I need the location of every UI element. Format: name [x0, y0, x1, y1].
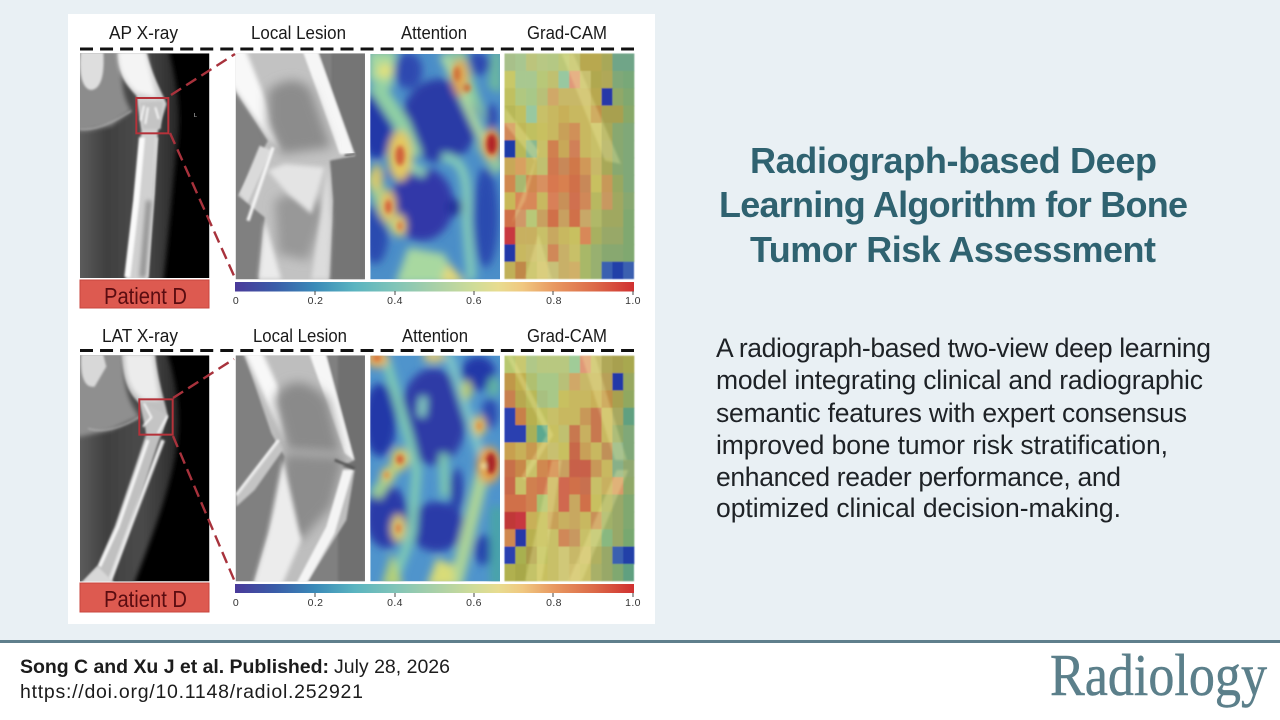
colorbar: LAT: 0.6: [466, 597, 482, 609]
panel: LAT row headings: [102, 326, 607, 346]
title: Tumor Risk Assessment: [750, 229, 1156, 270]
image: AP local lesion: [231, 47, 365, 284]
image: AP X-ray: L: [194, 113, 197, 119]
panel: LAT row headings: Local Lesion: [253, 326, 347, 346]
panel: figure: [68, 14, 655, 624]
panel: LAT row headings: Grad-CAM: [527, 326, 607, 346]
label: Patient D AP: Patient D: [104, 283, 187, 309]
panel: AP row headings: Local Lesion: [251, 23, 346, 43]
colorbar: AP: 0.6: [466, 295, 482, 307]
title: [719, 140, 1188, 270]
colorbar: LAT: 0.4: [387, 597, 403, 609]
colorbar: AP: 0.2: [308, 295, 323, 307]
arrow: LAT zoom lines: [173, 359, 235, 582]
heatmap: AP Grad-CAM: [504, 54, 634, 279]
colorbar: AP: 1.0: [625, 295, 641, 307]
colorbar: LAT: 0: [233, 597, 239, 609]
callout: lesion box AP: [136, 98, 168, 133]
colorbar: LAT: [233, 584, 641, 609]
callout: lesion box LAT: [139, 399, 173, 435]
citation: https://doi.org/10.1148/radiol.252921: [20, 681, 363, 703]
text block: summary: [716, 333, 1211, 523]
image: LAT X-ray: [75, 350, 209, 587]
image: AP X-ray: [75, 47, 209, 284]
colorbar: AP: 0.4: [387, 295, 403, 307]
heatmap: LAT attention: [370, 356, 500, 582]
label: Patient D LAT: Patient D: [104, 586, 187, 612]
panel: LAT row headings: LAT X-ray: [102, 326, 178, 346]
citation: July 28, 2026: [334, 656, 450, 678]
text block: summary: enhanced reader performance, and: [716, 462, 1121, 492]
panel: LAT row headings: Attention: [402, 326, 468, 346]
arrow: AP zoom lines: [170, 54, 235, 278]
image: LAT local lesion: [236, 350, 365, 587]
title: Learning Algorithm for Bone: [719, 184, 1188, 225]
colorbar: AP: [233, 282, 641, 307]
heatmap: AP attention: [370, 54, 500, 280]
panel: AP row headings: Grad-CAM: [527, 23, 607, 43]
colorbar: LAT: 0.8: [546, 597, 562, 609]
colorbar: AP: 0.8: [546, 295, 562, 307]
panel: AP row headings: Attention: [401, 23, 467, 43]
text block: summary: model integrating clinical and radiographic: [716, 365, 1203, 395]
panel: AP row headings: AP X-ray: [109, 23, 178, 43]
title: Radiograph-based Deep: [750, 140, 1157, 181]
text block: summary: optimized clinical decision-making.: [716, 493, 1121, 523]
colorbar: AP: 0: [233, 295, 239, 307]
text block: summary: improved bone tumor risk stratification,: [716, 430, 1168, 460]
footer: [0, 640, 1280, 720]
citation: [20, 656, 450, 703]
text block: summary: A radiograph-based two-view deep learning: [716, 333, 1211, 363]
heatmap: LAT Grad-CAM: [504, 356, 634, 581]
colorbar: LAT: 0.2: [308, 597, 323, 609]
colorbar: LAT: 1.0: [625, 597, 641, 609]
citation: Song C and Xu J et al. Published:: [20, 656, 329, 678]
panel: AP row headings: [109, 23, 607, 43]
label: Patient D LAT: [80, 583, 209, 612]
text block: summary: semantic features with expert consensus: [716, 398, 1187, 428]
label: Patient D AP: [80, 280, 209, 309]
